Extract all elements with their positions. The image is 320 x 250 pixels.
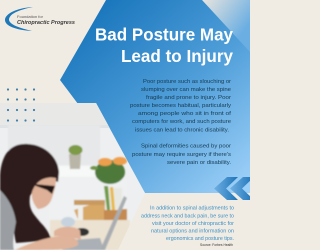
body text: bottom paragraph: visit your doctor of chiropractic for: [152, 221, 234, 227]
body text: bottom paragraph: ergonomics and posture tips.: [166, 236, 234, 242]
sweater: [0, 190, 16, 250]
title: Lead to Injury: [121, 46, 233, 66]
body text: paragraph 1: computers for work, and such posture: [132, 119, 231, 125]
body text: bottom paragraph: address neck and back pain, be sure to: [141, 214, 234, 220]
body text: paragraph 1: fragile and prone to injury. Poor: [146, 95, 231, 101]
body text: paragraph 2: posture may require surgery if there's: [132, 152, 231, 158]
background: [0, 0, 250, 250]
photo: woman hunched over laptop: [0, 103, 150, 250]
title: Bad Posture May: [95, 24, 233, 44]
body text: paragraph 1: posture becomes habitual, particularly: [130, 103, 231, 109]
body text: paragraph 1: among people who sit in front of: [138, 111, 232, 117]
grey corner accent: [202, 0, 250, 52]
body text: paragraph 1: [130, 79, 232, 134]
body text: bottom paragraph: [141, 206, 234, 242]
chevron arrows: [214, 177, 254, 200]
source note: Source: Forbes Health: [200, 243, 233, 247]
dot grid: [7, 88, 35, 122]
laptop: [62, 238, 104, 250]
title: [95, 24, 233, 66]
logo: Foundation for Chiropractic Progress: Foundation for: [17, 15, 44, 19]
translucent white band over photo: [0, 103, 108, 125]
arm and hand: [15, 236, 78, 250]
body text: paragraph 2: [132, 144, 231, 166]
body text: paragraph 1: Poor posture such as slouching or: [143, 79, 231, 85]
body text: bottom paragraph: In addition to spinal adjustments to: [150, 206, 234, 212]
hair: [0, 144, 59, 243]
body text: bottom paragraph: natural options and information on: [151, 228, 234, 234]
body text: paragraph 1: slumping over can make the spine: [141, 87, 231, 93]
body text: paragraph 1: issues can lead to chronic disability.: [135, 128, 229, 134]
body text: paragraph 2: Spinal deformities caused by poor: [141, 144, 231, 150]
logo: Foundation for Chiropractic Progress: Chiropractic Progress: [17, 20, 75, 26]
logo: Foundation for Chiropractic Progress: [5, 7, 75, 31]
body text: paragraph 2: severe pain or disability.: [167, 160, 231, 166]
face: [32, 178, 56, 209]
icon: logo swoosh: [5, 7, 33, 31]
blue hexagon panel: [60, 0, 250, 193]
